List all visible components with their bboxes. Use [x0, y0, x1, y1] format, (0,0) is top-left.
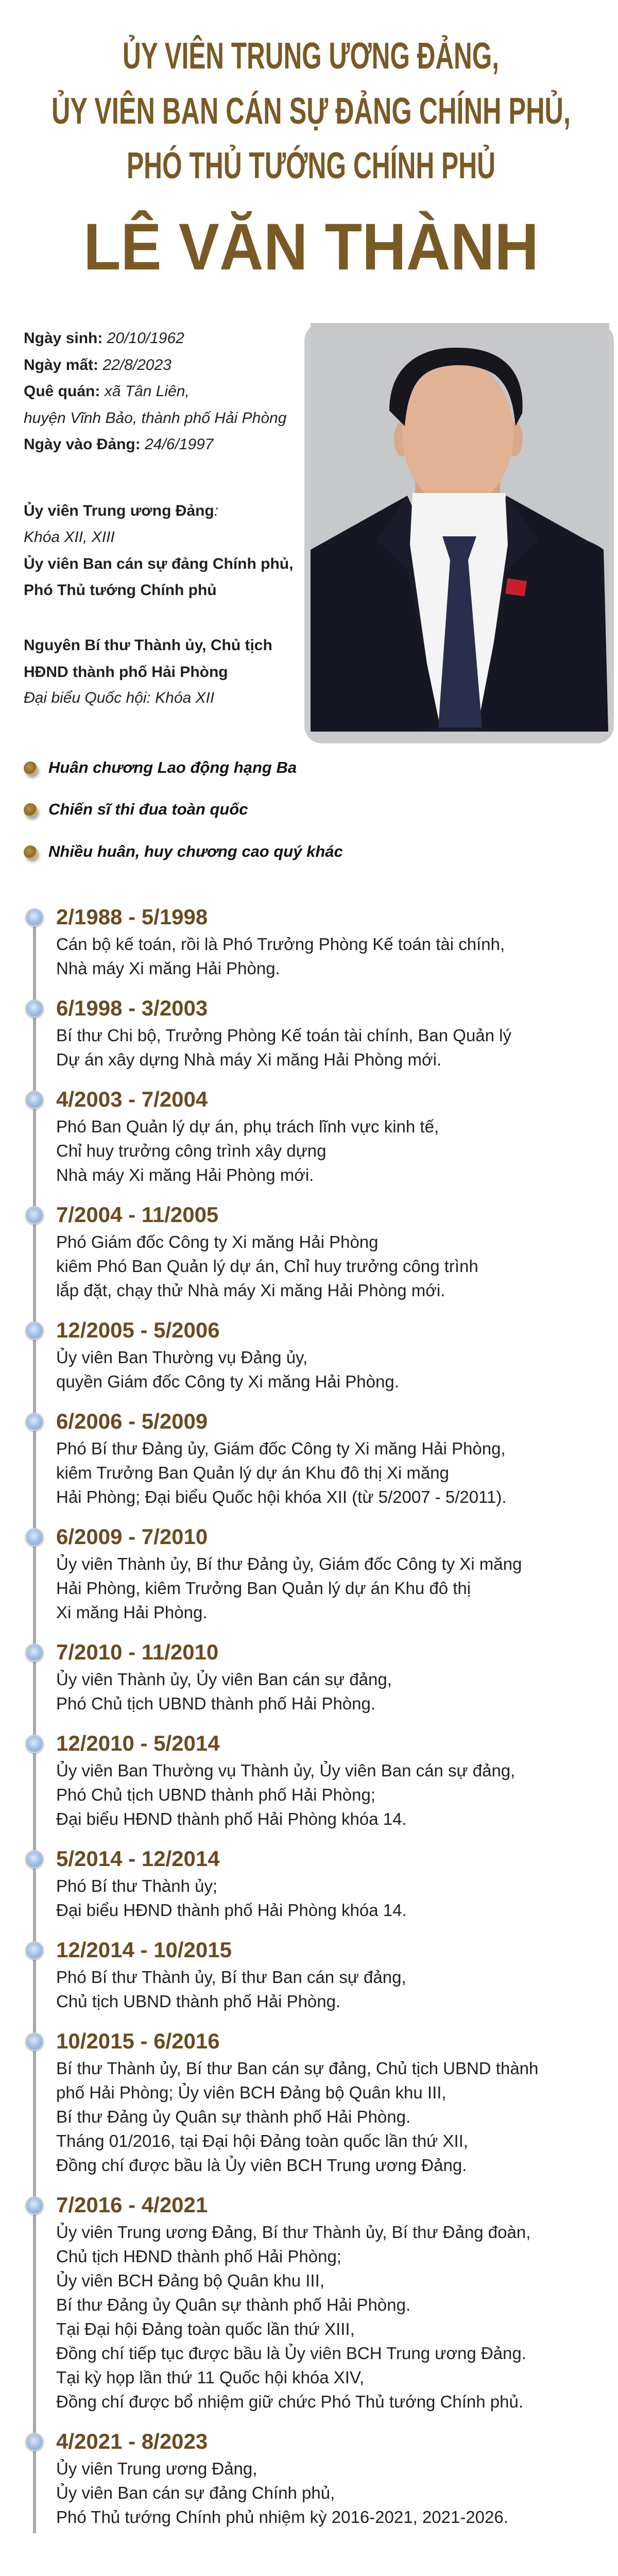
entry 7	[25, 1524, 522, 1622]
entry 11	[25, 1938, 406, 2011]
entry 10: Phó Bí thư Thành ủy;	[56, 1876, 217, 1895]
personal info text block: Nguyên Bí thư Thành ủy, Chủ tịch	[24, 637, 272, 654]
entry 2: 6/1998 - 3/2003	[56, 996, 208, 1020]
entry 7: Xi măng Hải Phòng.	[56, 1603, 208, 1622]
personal info text block: Ngày vào Đảng: 24/6/1997	[24, 436, 214, 453]
entry 5: quyền Giám đốc Công ty Xi măng Hải Phòng.	[56, 1372, 399, 1391]
entry 11: 12/2014 - 10/2015	[56, 1938, 232, 1962]
entry 11: Phó Bí thư Thành ủy, Bí thư Ban cán sự đảng,	[56, 1968, 406, 1987]
entry 1: Nhà máy Xi măng Hải Phòng.	[56, 959, 280, 978]
personal info text block: Ủy viên Trung ương Đảng:	[24, 502, 218, 519]
personal info text block: Khóa XII, XIII	[24, 529, 115, 546]
entry 14: 4/2021 - 8/2023	[56, 2429, 208, 2453]
entry 9: Đại biểu HĐND thành phố Hải Phòng khóa 14.	[56, 1809, 407, 1828]
entry 3	[25, 1087, 439, 1184]
entry 14: Ủy viên Ban cán sự đảng Chính phủ,	[56, 2483, 335, 2502]
award 3: Nhiều huân, huy chương cao quý khác	[48, 842, 343, 860]
entry 12: Bí thư Thành ủy, Bí thư Ban cán sự đảng, Chủ tịch UBND thành	[56, 2059, 538, 2078]
entry 6: kiêm Trưởng Ban Quản lý dự án Khu đô thị Xi măng	[56, 1463, 449, 1482]
award 2: Chiến sĩ thi đua toàn quốc	[48, 800, 248, 818]
entry 12	[25, 2029, 538, 2175]
entry 6: Phó Bí thư Đảng ủy, Giám đốc Công ty Xi măng Hải Phòng,	[56, 1439, 506, 1458]
entry 1	[25, 905, 505, 978]
entry 10: Đại biểu HĐND thành phố Hải Phòng khóa 14.	[56, 1901, 407, 1920]
entry 4: lắp đặt, chạy thử Nhà máy Xi măng Hải Phòng mới.	[56, 1281, 445, 1300]
entry 13: Ủy viên BCH Đảng bộ Quân khu III,	[56, 2271, 324, 2290]
personal info text block: HĐND thành phố Hải Phòng	[24, 664, 228, 681]
portrait photo	[304, 323, 614, 743]
entry 12: Bí thư Đảng ủy Quân sự thành phố Hải Phòng.	[56, 2107, 410, 2126]
entry 4: kiêm Phó Ban Quản lý dự án, Chỉ huy trưởng công trình	[56, 1257, 478, 1276]
entry 5: Ủy viên Ban Thường vụ Đảng ủy,	[56, 1348, 307, 1367]
entry 12: Đồng chí được bầu là Ủy viên BCH Trung ương Đảng.	[56, 2156, 467, 2175]
entry 12: 10/2015 - 6/2016	[56, 2029, 220, 2053]
entry 9: 12/2010 - 5/2014	[56, 1731, 220, 1755]
entry 13: Tại kỳ họp lần thứ 11 Quốc hội khóa XIV,	[56, 2368, 364, 2387]
personal info text block: huyện Vĩnh Bảo, thành phố Hải Phòng	[24, 410, 286, 427]
entry 14: Ủy viên Trung ương Đảng,	[56, 2459, 257, 2478]
entry 7: Hải Phòng, kiêm Trưởng Ban Quản lý dự án Khu đô thị	[56, 1579, 471, 1598]
entry 10	[25, 1846, 407, 1920]
entry 8: Phó Chủ tịch UBND thành phố Hải Phòng.	[56, 1694, 375, 1713]
personal info text block: Ngày sinh: 20/10/1962	[24, 330, 184, 347]
entry 2	[25, 996, 511, 1069]
entry 1: 2/1988 - 5/1998	[56, 905, 208, 929]
entry 13: Đồng chí tiếp tục được bầu là Ủy viên BCH Trung ương Đảng.	[56, 2344, 526, 2363]
entry 13: Ủy viên Trung ương Đảng, Bí thư Thành ủy, Bí thư Đảng đoàn,	[56, 2223, 530, 2242]
entry 10: 5/2014 - 12/2014	[56, 1846, 220, 1871]
entry 8: Ủy viên Thành ủy, Ủy viên Ban cán sự đảng,	[56, 1670, 392, 1689]
entry 5: 12/2005 - 5/2006	[56, 1318, 220, 1342]
entry 4	[25, 1202, 478, 1300]
entry 3: Nhà máy Xi măng Hải Phòng mới.	[56, 1165, 314, 1184]
entry 7: Ủy viên Thành ủy, Bí thư Đảng ủy, Giám đốc Công ty Xi măng	[56, 1554, 522, 1573]
entry 4: Phó Giám đốc Công ty Xi măng Hải Phòng	[56, 1232, 379, 1251]
entry 13: Tại Đại hội Đảng toàn quốc lần thứ XIII,	[56, 2319, 355, 2338]
personal info text block: Phó Thủ tướng Chính phủ	[24, 582, 217, 599]
timeline vertical line	[33, 918, 36, 2533]
entry 13: Bí thư Đảng ủy Quân sự thành phố Hải Phòng.	[56, 2295, 410, 2314]
title	[52, 35, 571, 284]
personal info text block: Đại biểu Quốc hội: Khóa XII	[24, 689, 214, 706]
entry 13: Chủ tịch HĐND thành phố Hải Phòng;	[56, 2247, 341, 2266]
personal info text block: Ngày mất: 22/8/2023	[24, 357, 171, 374]
entry 13	[25, 2193, 530, 2411]
entry 9: Phó Chủ tịch UBND thành phố Hải Phòng;	[56, 1785, 375, 1804]
entry 5	[25, 1318, 399, 1391]
entry 11: Chủ tịch UBND thành phố Hải Phòng.	[56, 1992, 340, 2011]
entry 3: 4/2003 - 7/2004	[56, 1087, 208, 1111]
entry 4: 7/2004 - 11/2005	[56, 1202, 218, 1227]
entry 3: Chỉ huy trưởng công trình xây dựng	[56, 1141, 326, 1160]
personal info text block	[24, 330, 293, 706]
entry 14	[25, 2429, 508, 2527]
entry 13: Đồng chí được bổ nhiệm giữ chức Phó Thủ tướng Chính phủ.	[56, 2392, 523, 2411]
awards list	[24, 758, 343, 863]
title: LÊ VĂN THÀNH	[83, 210, 539, 284]
entry 9: Ủy viên Ban Thường vụ Thành ủy, Ủy viên Ban cán sự đảng,	[56, 1761, 515, 1780]
entry 13: 7/2016 - 4/2021	[56, 2193, 208, 2217]
entry 8: 7/2010 - 11/2010	[56, 1640, 218, 1664]
entry 6: 6/2006 - 5/2009	[56, 1409, 208, 1433]
entry 7: 6/2009 - 7/2010	[56, 1524, 208, 1549]
entry 12: phố Hải Phòng; Ủy viên BCH Đảng bộ Quân khu III,	[56, 2083, 447, 2102]
entry 2: Bí thư Chi bộ, Trưởng Phòng Kế toán tài chính, Ban Quản lý	[56, 1026, 511, 1045]
entry 8	[25, 1640, 392, 1713]
entry 6	[25, 1409, 507, 1506]
personal info text block: Ủy viên Ban cán sự đảng Chính phủ,	[24, 555, 293, 572]
award 1: Huân chương Lao động hạng Ba	[48, 758, 297, 776]
entry 14: Phó Thủ tướng Chính phủ nhiệm kỳ 2016-2021, 2021-2026.	[56, 2507, 508, 2527]
timeline	[25, 905, 538, 2533]
entry 9	[25, 1731, 515, 1828]
entry 3: Phó Ban Quản lý dự án, phụ trách lĩnh vực kinh tế,	[56, 1117, 439, 1136]
entry 12: Tháng 01/2016, tại Đại hội Đảng toàn quốc lần thứ XII,	[56, 2131, 468, 2150]
entry 2: Dự án xây dựng Nhà máy Xi măng Hải Phòng mới.	[56, 1050, 441, 1069]
entry 1: Cán bộ kế toán, rồi là Phó Trưởng Phòng Kế toán tài chính,	[56, 935, 505, 954]
entry 6: Hải Phòng; Đại biểu Quốc hội khóa XII (từ 5/2007 - 5/2011).	[56, 1487, 507, 1506]
personal info text block: Quê quán: xã Tân Liên,	[24, 383, 190, 400]
